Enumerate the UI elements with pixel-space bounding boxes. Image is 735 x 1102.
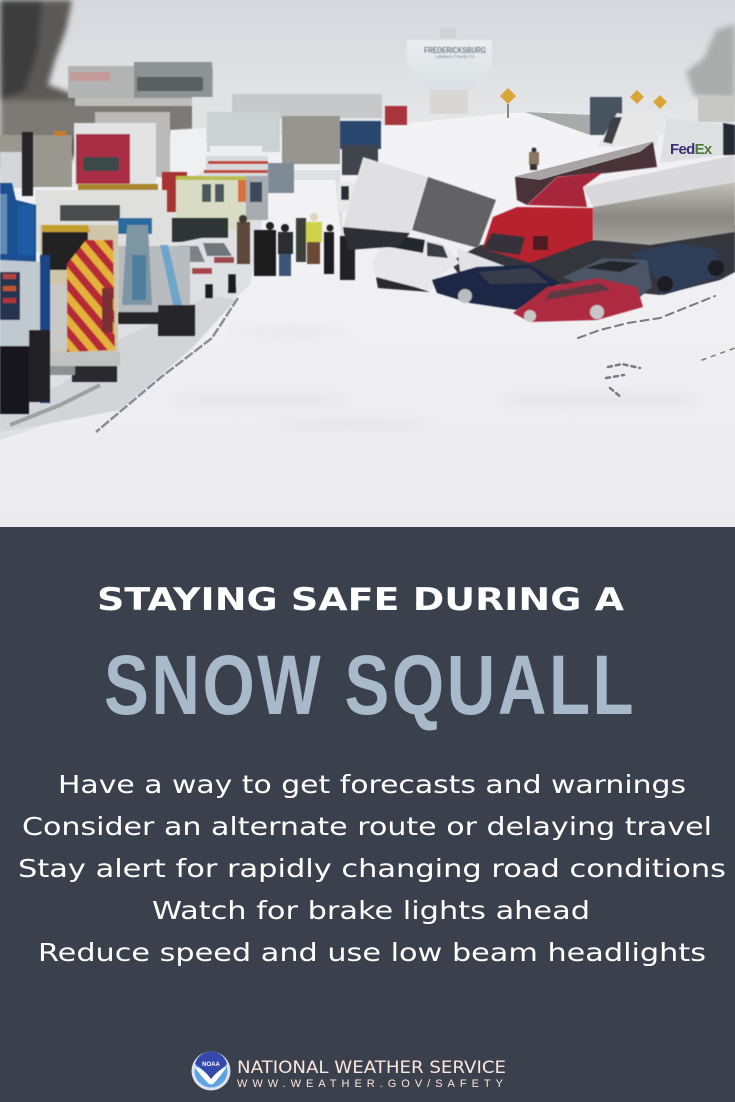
white car behind [458, 248, 505, 272]
road on the crest [525, 112, 592, 135]
distant building [68, 62, 213, 106]
icon: NOAA logo [192, 1052, 230, 1090]
footer: national weather service: NATIONAL WEATHER SERVICE [237, 1058, 506, 1078]
trees and haze at upper left [0, 0, 200, 170]
text block: safety tips: Watch for brake lights ahead [152, 896, 590, 925]
blue heavy wrecker [0, 132, 50, 414]
tow truck [35, 184, 195, 336]
dark trailer top edge [515, 142, 653, 180]
soft tyre shading on snow [578, 399, 626, 400]
dump truck [0, 131, 72, 188]
person on the hill [529, 148, 539, 170]
white pickup [372, 233, 460, 292]
text block: safety tips [18, 770, 726, 967]
fire engines behind ambulance [204, 146, 268, 176]
red tanker cab [482, 207, 593, 263]
trees at upper right [686, 24, 735, 98]
panel: crash scene photo [0, 0, 735, 527]
police cars [171, 217, 237, 299]
responders and bystanders [237, 213, 355, 280]
ambulance [162, 168, 268, 230]
silver tanker [593, 182, 735, 245]
white trailers [597, 113, 735, 163]
fire truck with chevrons [40, 225, 120, 382]
water tower [407, 28, 492, 114]
road slush [0, 295, 236, 432]
navy SUV [432, 265, 560, 310]
white trailer above tanker [583, 155, 735, 207]
dark red trailer [515, 142, 657, 205]
crushed red cab [527, 172, 603, 207]
text block: safety tips: Have a way to get forecasts and warnings [58, 770, 686, 799]
text block: safety tips: Consider an alternate route or delaying travel [22, 812, 712, 841]
icon: NOAA logo: NOAA [202, 1062, 220, 1068]
FedEx logo: FedEx [670, 141, 713, 158]
red semi truck [74, 112, 170, 186]
road between vehicles and median [0, 170, 345, 440]
water tower: FREDERICKSBURG [424, 45, 486, 55]
grey SUV [563, 258, 652, 297]
panel: dark text panel [0, 527, 735, 1102]
distant cars near people [268, 163, 294, 193]
sky [0, 0, 735, 135]
text block: safety tips: Reduce speed and use low beam headlights [38, 938, 706, 967]
text block: safety tips: Stay alert for rapidly changing road conditions [18, 854, 726, 883]
heading: staying safe during a: STAYING SAFE DURING A [97, 582, 624, 618]
red sedan [513, 278, 643, 322]
water tower: Lebanon County PA [435, 54, 475, 59]
white box truck [338, 157, 496, 250]
footer: website: WWW.WEATHER.GOV/SAFETY [237, 1078, 504, 1090]
far right semi [590, 96, 735, 135]
snow hill [381, 112, 589, 135]
road signs [500, 88, 667, 118]
road rut lines [10, 298, 238, 432]
snow on road shoulder [250, 180, 345, 285]
dark undercarriage behind wreck [450, 225, 735, 295]
dark ruts in snow on right [578, 296, 735, 398]
heading: snow squall: SNOW SQUALL [104, 639, 634, 733]
blue pickup [630, 243, 724, 295]
distant traffic [170, 94, 407, 175]
